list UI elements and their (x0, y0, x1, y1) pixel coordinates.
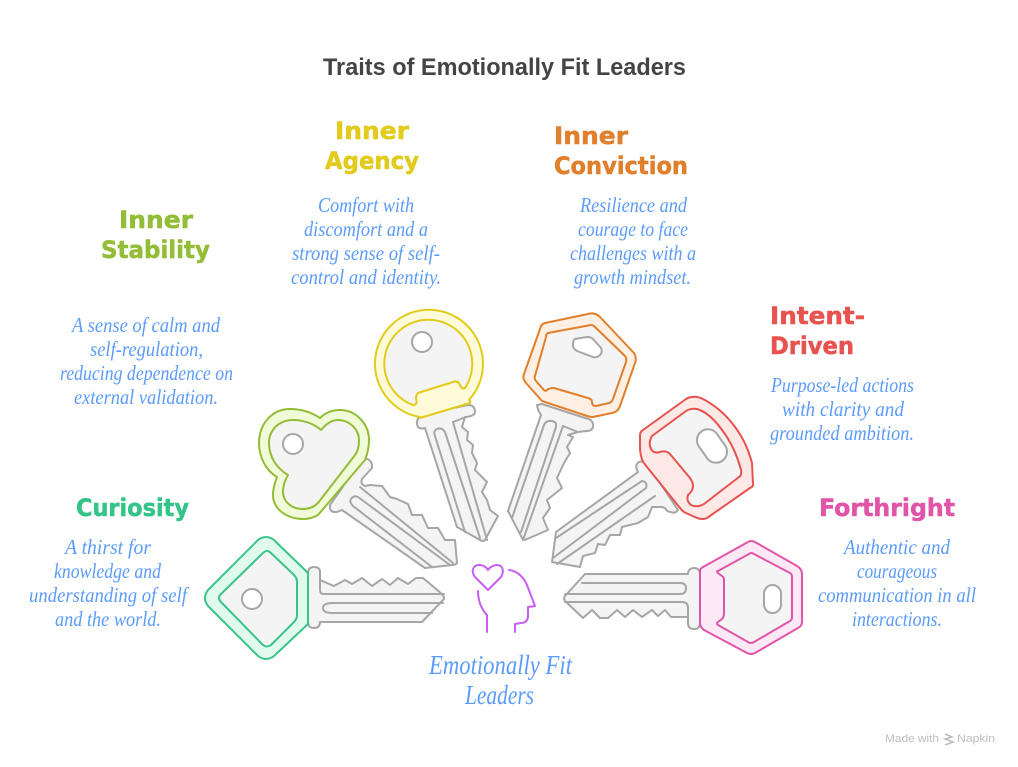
text: intent-driven description: with clarity and (782, 397, 904, 421)
text: intent-driven description: grounded ambition. (770, 421, 914, 445)
heading: curiosity: Curiosity (76, 494, 189, 522)
text: inner stability description: self-regulation, (90, 337, 203, 361)
text: inner stability description: external validation. (74, 385, 218, 409)
watermark: made with napkin: Napkin (957, 733, 995, 745)
text: forthright description: interactions. (852, 607, 942, 631)
heading: forthright: Forthright (819, 494, 955, 522)
text: inner stability description: reducing dependence on (60, 361, 233, 385)
heading: intent-driven (770, 302, 865, 360)
text: inner conviction description: Resilience and (579, 193, 687, 217)
text: curiosity description: A thirst for (63, 535, 152, 559)
icon: inner agency key (375, 310, 498, 541)
text: forthright description: courageous (857, 559, 937, 583)
heading: inner agency: Agency (325, 147, 419, 175)
text: intent-driven description (770, 373, 914, 445)
text: curiosity description (29, 535, 190, 631)
label: emotionally fit leaders: Leaders (464, 680, 534, 710)
heading: intent-driven: Intent- (770, 302, 865, 330)
text: curiosity description: knowledge and (54, 559, 161, 583)
watermark: made with napkin: Made with (885, 733, 939, 745)
title: Traits of Emotionally Fit Leaders (323, 54, 686, 81)
heading: inner conviction: Conviction (554, 152, 688, 180)
watermark: made with napkin (885, 733, 995, 745)
text: inner agency description: strong sense of self- (292, 241, 440, 265)
text: curiosity description: understanding of self (29, 583, 190, 607)
text: intent-driven description: Purpose-led actions (770, 373, 914, 397)
text: forthright description: Authentic and (842, 535, 950, 559)
text: inner agency description (291, 193, 441, 289)
text: inner agency description: discomfort and a (304, 217, 428, 241)
heading: inner conviction: Inner (554, 122, 628, 150)
icon: inner conviction key (508, 313, 636, 540)
text: inner agency description: control and identity. (291, 265, 441, 289)
text: inner conviction description (570, 193, 696, 289)
text: inner stability description (60, 313, 233, 409)
text: inner conviction description: challenges with a (570, 241, 696, 265)
icon: head with heart (473, 565, 535, 632)
text: inner stability description: A sense of calm and (70, 313, 220, 337)
icon: forthright key (564, 541, 802, 654)
text: inner agency description: Comfort with (318, 193, 414, 217)
icon: curiosity key (205, 537, 444, 659)
heading: inner conviction (554, 122, 688, 180)
text: inner conviction description: growth mindset. (574, 265, 691, 289)
text: inner conviction description: courage to face (578, 217, 688, 241)
icon: intent-driven key (552, 397, 753, 567)
heading: inner stability: Inner (119, 206, 193, 234)
label: emotionally fit leaders (428, 650, 573, 710)
label: emotionally fit leaders: Emotionally Fit (428, 650, 573, 680)
text: curiosity description: and the world. (55, 607, 161, 631)
heading: inner agency (325, 117, 419, 175)
text: forthright description (818, 535, 976, 631)
heading: inner agency: Inner (335, 117, 409, 145)
heading: inner stability: Stability (101, 236, 210, 264)
heading: intent-driven: Driven (770, 332, 854, 360)
text: forthright description: communication in all (818, 583, 976, 607)
heading: inner stability (101, 206, 210, 264)
icon: inner stability key (259, 409, 457, 568)
